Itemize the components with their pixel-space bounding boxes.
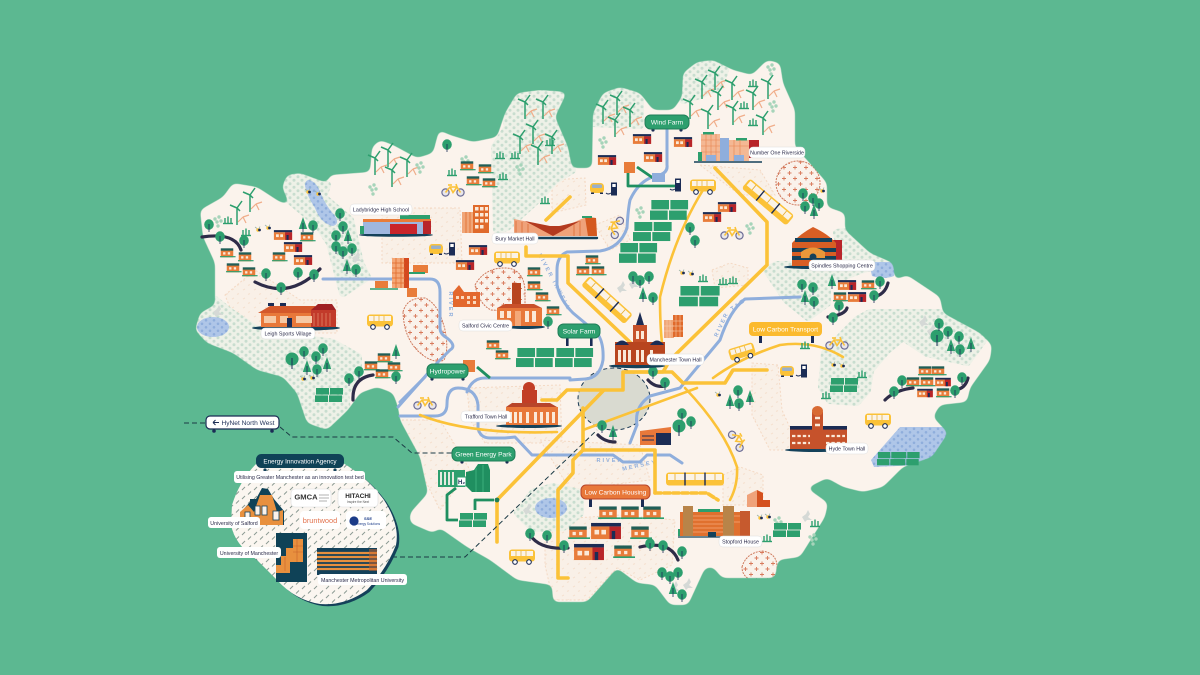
label: Bury Market Hall [492, 233, 538, 244]
river names: RIVER [447, 291, 453, 319]
label: Bury Market Hall: Bury Market Hall [495, 236, 535, 242]
label: Hyde Town Hall [826, 443, 868, 454]
blob body [231, 463, 397, 604]
label: Ladybridge High School: Ladybridge High School [353, 208, 409, 214]
trees [204, 139, 975, 602]
Stopford House [678, 506, 750, 537]
label: hydropower: Hydropower [430, 368, 466, 376]
Bruntwood logo: bruntwood [303, 516, 337, 525]
label: University of Salford: University of Salford [210, 521, 258, 527]
label: HyNet North West [206, 416, 279, 433]
Trafford Town Hall [496, 382, 562, 428]
label: Trafford Town Hall [461, 411, 511, 422]
electric cars and chargers [429, 178, 807, 378]
label: low carbon transport [749, 322, 822, 343]
agency title [256, 454, 344, 472]
tagline [234, 471, 365, 483]
junction node [495, 498, 499, 502]
Bruntwood logo [300, 511, 340, 529]
SSE logo [346, 511, 386, 529]
GMCA logo [291, 489, 331, 507]
river names: TAE [730, 298, 747, 312]
label: low carbon housing [581, 485, 650, 507]
Green Energy hydrogen plant [438, 464, 490, 492]
agency title: Energy Innovation Agency [263, 458, 337, 466]
label: Spindles Shopping Centre: Spindles Shopping Centre [811, 264, 873, 270]
Hyde Town Hall [785, 406, 847, 452]
tagline: Utilising Greater Manchester as an innovation test bed [236, 475, 364, 481]
label: Stopford House [719, 536, 762, 547]
dashed pipeline [184, 423, 597, 557]
bikes [414, 184, 848, 453]
label: Manchester Town Hall: Manchester Town Hall [649, 358, 702, 364]
label: Leigh Sports Village: Leigh Sports Village [264, 332, 312, 338]
river names: RIVER [714, 311, 731, 338]
GMCA logo: GMCA [294, 492, 318, 502]
apartment block [462, 205, 489, 233]
building labels [261, 147, 875, 547]
green energy pipes [447, 167, 677, 520]
label: green energy park [452, 447, 515, 464]
label: low carbon housing: Low Carbon Housing [585, 490, 647, 496]
Manchester Town Hall [609, 312, 665, 368]
label: University of Salford [208, 517, 260, 528]
map land [196, 60, 992, 606]
label: Leigh Sports Village [261, 328, 315, 339]
Hitachi logo: HITACHI [345, 493, 371, 500]
Salford Civic Centre [497, 283, 545, 329]
cross texture zones [403, 161, 820, 579]
lakes [197, 180, 948, 518]
Bury Market Hall [514, 216, 597, 238]
labels: wind farm [645, 115, 689, 140]
shrubs and flowers [213, 63, 937, 593]
Manchester Metropolitan University building [317, 548, 377, 575]
dotted green zones [190, 60, 983, 528]
label: University of Manchester [217, 547, 281, 558]
Spindles Shopping Centre [784, 227, 842, 269]
river names [447, 253, 747, 473]
label: green energy park: Green Energy Park [455, 452, 512, 458]
label: Ladybridge High School [350, 204, 412, 215]
small apartment [664, 315, 683, 338]
blob shadow [234, 465, 399, 606]
map of Greater Manchester [184, 60, 992, 606]
label: low carbon transport: Low Carbon Transport [753, 326, 818, 334]
label: Number One Riverside: Number One Riverside [750, 150, 804, 156]
river names: RIVER [596, 458, 624, 464]
Ladybridge High School [359, 215, 433, 237]
label: solar farm: Solar Farm [563, 328, 596, 336]
buses and trams [367, 178, 891, 564]
label: Stopford House: Stopford House [722, 540, 759, 546]
labels: wind farm: Wind Farm [651, 120, 684, 126]
Green Energy hydrogen plant: H₂ [458, 480, 465, 486]
Salford brick buildings [453, 285, 480, 307]
label: Hyde Town Hall: Hyde Town Hall [829, 446, 865, 452]
solar panels [315, 200, 920, 537]
dark local roads [202, 236, 968, 560]
label: hydropower [427, 364, 468, 381]
University of Manchester building [276, 533, 307, 582]
wind turbines [230, 66, 780, 225]
grey urban zone [578, 368, 650, 430]
label: HyNet North West: HyNet North West [221, 420, 275, 427]
label: Manchester Metropolitan University: Manchester Metropolitan University [321, 578, 404, 584]
panel: Energy Innovation Agency [208, 454, 407, 606]
label: Spindles Shopping Centre [809, 260, 875, 271]
University of Salford building [240, 488, 284, 525]
label: University of Manchester: University of Manchester [220, 551, 278, 557]
Number One Riverside [694, 132, 762, 162]
label: Salford Civic Centre: Salford Civic Centre [462, 324, 509, 330]
hex texture zones [225, 165, 800, 600]
Leigh Sports Village [252, 303, 340, 331]
label: solar farm [558, 324, 600, 346]
SSE logo: Energy Solutions [356, 522, 380, 526]
SSE logo: SSE [364, 516, 372, 521]
label: Salford Civic Centre [459, 320, 512, 331]
orange building [640, 427, 671, 445]
label: Number One Riverside [749, 147, 805, 158]
low carbon transport lines [420, 168, 843, 578]
low carbon housing estate [568, 506, 664, 560]
river names: RIVER IRWELL [536, 253, 572, 312]
pipe boxes [407, 162, 665, 372]
rivers [323, 130, 800, 463]
houses [220, 134, 952, 397]
brick block [747, 490, 770, 507]
Hitachi logo: Inspire the Next [347, 500, 369, 504]
river names: MERSEY [622, 459, 658, 473]
label: Manchester Town Hall [647, 354, 704, 365]
label: Manchester Metropolitan University [318, 574, 407, 585]
tower block and small buildings [370, 258, 428, 289]
Hitachi logo [338, 489, 378, 507]
label: Trafford Town Hall: Trafford Town Hall [465, 414, 507, 420]
